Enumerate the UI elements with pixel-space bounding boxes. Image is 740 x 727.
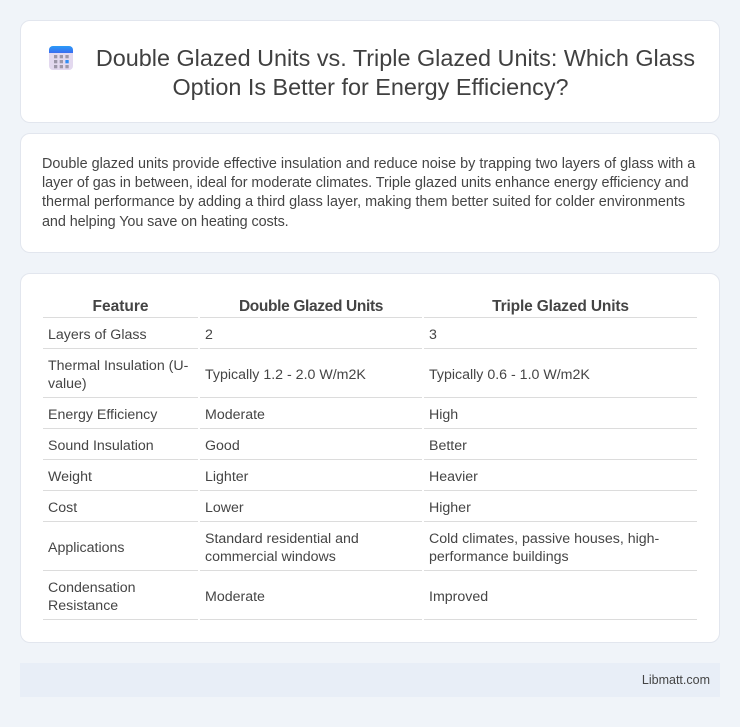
row: sound insulation: Good: [205, 438, 240, 454]
row: sound insulation: Sound Insulation: [48, 438, 154, 454]
text block: introduction: and helping You save on heating costs.: [42, 214, 289, 230]
row: thermal insulation: [48, 358, 590, 392]
row: energy efficiency: [48, 407, 458, 423]
row: applications: performance buildings: [429, 549, 569, 565]
row: weight: [48, 469, 478, 485]
row: energy efficiency: Moderate: [205, 407, 265, 423]
row: applications: Cold climates, passive houses, high-: [429, 531, 659, 547]
text block: introduction: layer of gas in between, ideal for moderate climates. Triple glazed units enhance energy efficiency and: [42, 175, 689, 191]
row: sound insulation: [48, 438, 467, 454]
row: energy efficiency: Energy Efficiency: [48, 407, 157, 423]
row: thermal insulation: Thermal Insulation (U-: [48, 358, 188, 374]
heading: title: Option Is Better for Energy Efficiency?: [172, 74, 569, 100]
panel: introduction: [20, 133, 720, 253]
table header: Feature: [92, 298, 148, 315]
footer: [20, 663, 720, 697]
table header: [92, 298, 629, 315]
row: cost: Lower: [205, 500, 244, 516]
panel: title card: [20, 20, 720, 123]
row: applications: [48, 531, 659, 565]
row: layers of glass: [48, 327, 437, 343]
table header: Triple Glazed Units: [492, 298, 629, 315]
row: layers of glass: 2: [205, 327, 213, 343]
panel: comparison table: [20, 273, 720, 643]
row: layers of glass: 3: [429, 327, 437, 343]
footer: Libmatt.com: [642, 673, 710, 687]
row: cost: Higher: [429, 500, 471, 516]
table header: Double Glazed Units: [239, 298, 383, 315]
heading: title: Double Glazed Units vs. Triple Glazed Units: Which Glass: [96, 45, 695, 71]
row: sound insulation: Better: [429, 438, 467, 454]
row: weight: Lighter: [205, 469, 248, 485]
text block: introduction: thermal performance by adding a third glass layer, making them better suited for colder environments: [42, 194, 685, 210]
row: applications: Standard residential and: [205, 531, 359, 547]
row: thermal insulation: Typically 0.6 - 1.0 W/m2K: [429, 367, 590, 383]
row: condensation resistance: Condensation: [48, 580, 136, 596]
text block: introduction: [42, 156, 696, 230]
row: cost: Cost: [48, 500, 77, 516]
text block: introduction: Double glazed units provide effective insulation and reduce noise by trapping two layers of glass with a: [42, 156, 695, 172]
row: condensation resistance: Resistance: [48, 598, 118, 614]
table: comparison: [43, 298, 697, 620]
row: applications: commercial windows: [205, 549, 336, 565]
row: cost: [48, 500, 471, 516]
row: thermal insulation: Typically 1.2 - 2.0 W/m2K: [205, 367, 366, 383]
heading: title: [96, 45, 695, 100]
row: energy efficiency: High: [429, 407, 458, 423]
row: condensation resistance: Improved: [429, 589, 488, 605]
row: weight: Weight: [48, 469, 92, 485]
row: condensation resistance: [48, 580, 488, 614]
row: condensation resistance: Moderate: [205, 589, 265, 605]
row: thermal insulation: value): [48, 376, 87, 392]
row: weight: Heavier: [429, 469, 478, 485]
icon: calendar: [49, 46, 73, 70]
row: applications: Applications: [48, 540, 125, 556]
row: layers of glass: Layers of Glass: [48, 327, 147, 343]
